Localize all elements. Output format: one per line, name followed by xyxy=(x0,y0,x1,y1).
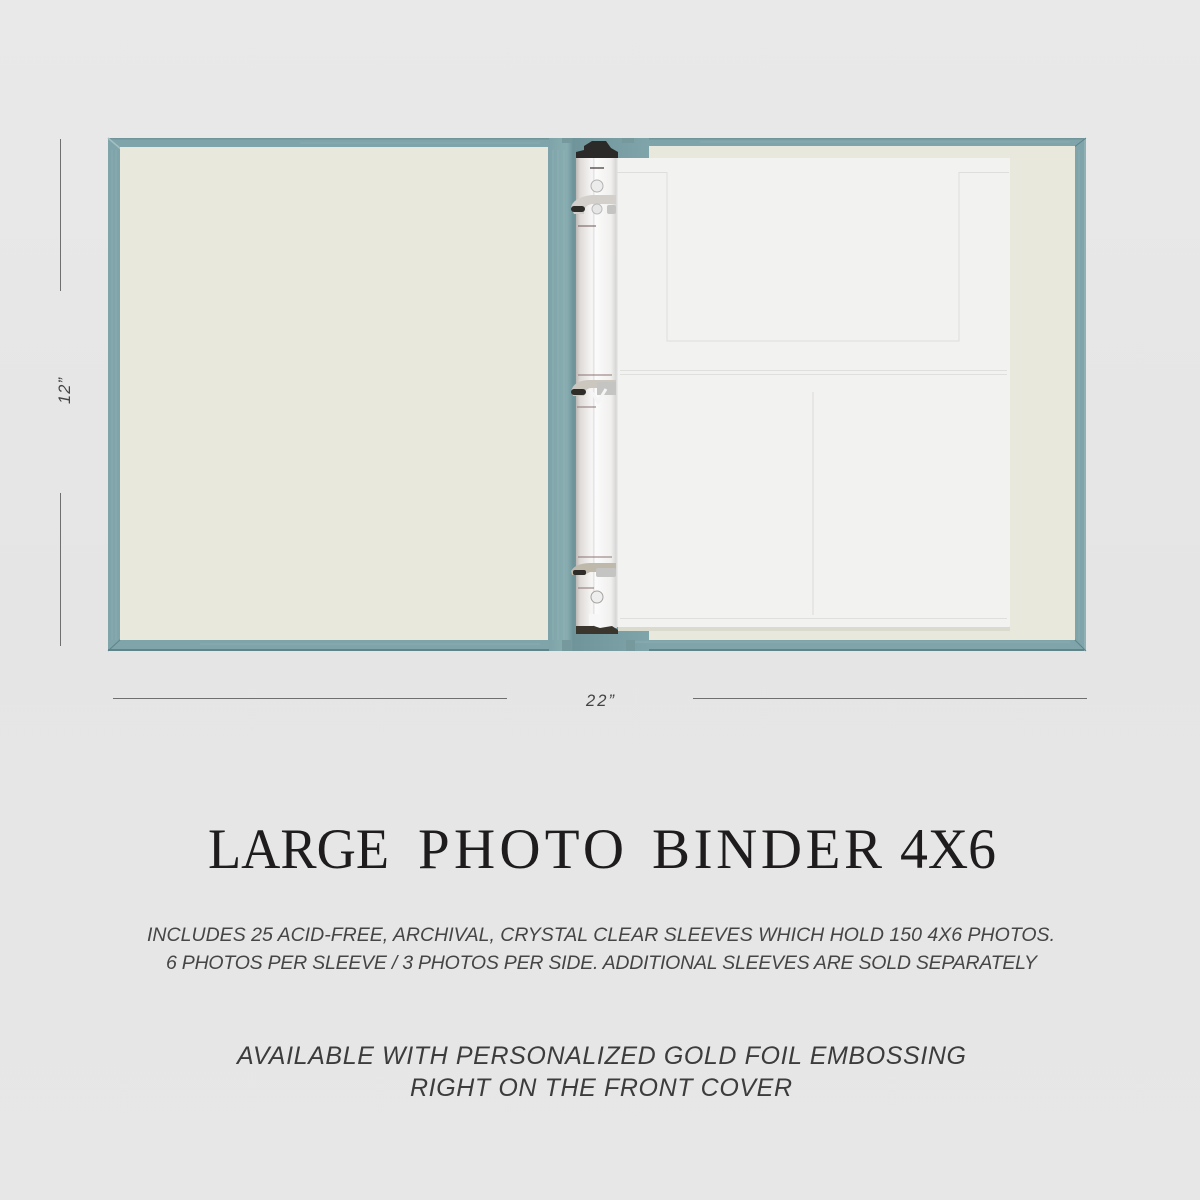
photo sleeve xyxy=(616,158,1010,631)
title: PHOTO xyxy=(418,818,624,881)
left inside lining xyxy=(120,147,548,640)
embossing note xyxy=(235,1042,966,1102)
bottom ring cap xyxy=(576,626,618,634)
embossing note: AVAILABLE WITH PERSONALIZED GOLD FOIL EMBOSSING xyxy=(235,1042,966,1070)
title: LARGE xyxy=(208,818,389,881)
description text xyxy=(147,924,1055,974)
title: 4X6 xyxy=(900,818,996,881)
binder xyxy=(108,138,1086,651)
title: BINDER xyxy=(652,818,882,881)
middle ring clamp xyxy=(571,375,616,407)
binder cover xyxy=(108,138,1086,651)
bottom ring clamp xyxy=(571,557,616,625)
right inside lining xyxy=(649,146,1075,640)
description text: INCLUDES 25 ACID-FREE, ARCHIVAL, CRYSTAL CLEAR SLEEVES WHICH HOLD 150 4X6 PHOTOS. xyxy=(147,924,1055,946)
dimension: width 22 inches: 22” xyxy=(585,692,616,710)
top ring cap xyxy=(576,141,618,158)
description text: 6 PHOTOS PER SLEEVE / 3 PHOTOS PER SIDE. ADDITIONAL SLEEVES ARE SOLD SEPARATELY xyxy=(166,952,1039,974)
dimension: height 12 inches: 12” xyxy=(56,376,74,404)
top ring clamp xyxy=(571,168,616,226)
three-ring mechanism xyxy=(571,141,618,634)
title xyxy=(208,818,996,881)
embossing note: RIGHT ON THE FRONT COVER xyxy=(410,1074,792,1102)
